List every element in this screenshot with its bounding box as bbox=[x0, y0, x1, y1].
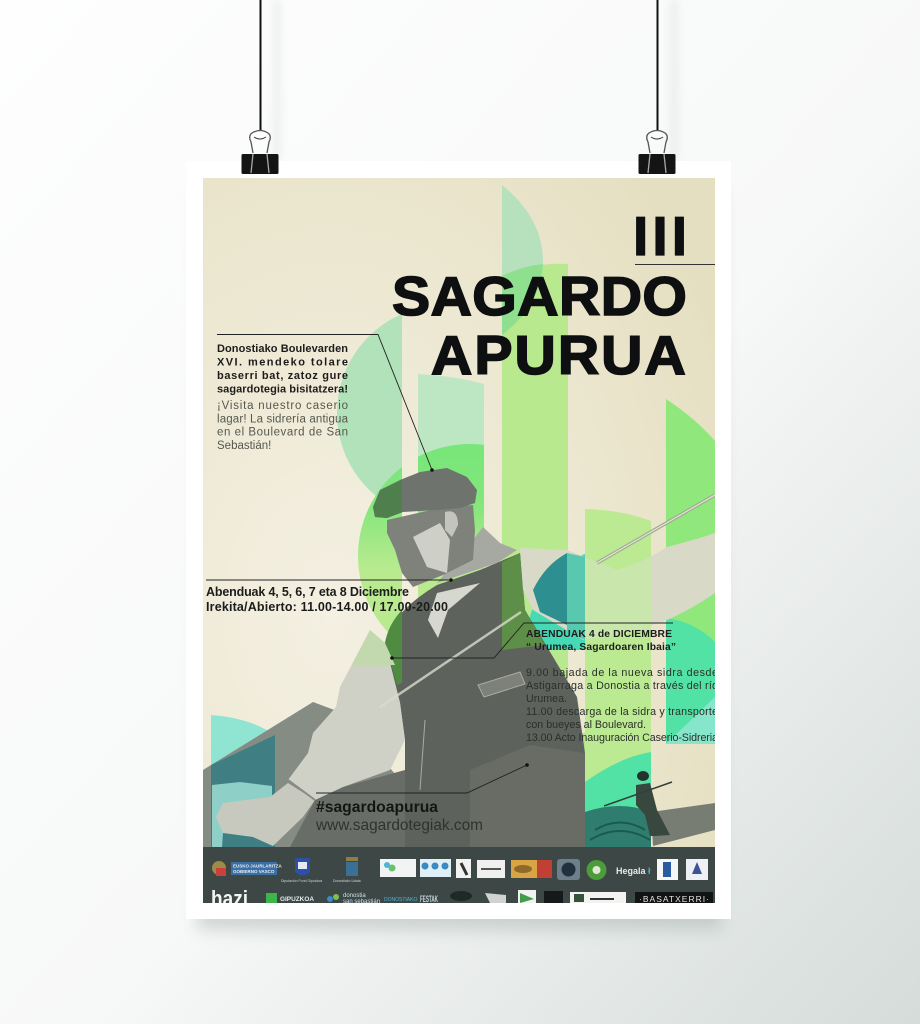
logo: Donostia San Sebastián: san sebastián bbox=[343, 899, 380, 905]
photo: shirt front bbox=[428, 583, 480, 638]
logo: Basque Government: GOBIERNO VASCO bbox=[233, 869, 275, 874]
text block: intro Basque: sagardotegia bisitatzera! bbox=[217, 384, 348, 396]
callout: dates leader line bbox=[206, 578, 453, 582]
shape: bright circle column part bbox=[418, 444, 484, 598]
photo: lime through sleeve bbox=[585, 558, 651, 640]
text block: programme: Urumea. bbox=[526, 693, 567, 705]
photo: small figure in distance bbox=[604, 771, 672, 836]
text block: intro Spanish: en el Boulevard de San bbox=[217, 426, 348, 438]
photo: window glow bbox=[212, 782, 272, 847]
text block: intro Basque: baserri bat, zatoz gure bbox=[217, 370, 348, 382]
icon: binder clip left bbox=[242, 130, 278, 174]
text block: programme: Astigarraga a Donostia a través del río bbox=[526, 680, 718, 692]
text block: intro Basque: Donostiako Boulevarden bbox=[217, 343, 348, 355]
logo: Basatxerri: ·BASATXERRI· bbox=[639, 894, 709, 904]
photo: shirt collar and scarf bbox=[437, 527, 517, 583]
shape: right column bbox=[666, 399, 715, 744]
shape: teal right bbox=[666, 618, 715, 744]
shape: top half circle bbox=[502, 185, 543, 276]
photo: cider maker bbox=[203, 468, 715, 847]
logo: Hegala: Hegala ł bbox=[616, 866, 651, 876]
text block: programme: 9.00 bajada de la nueva sidra desde bbox=[526, 667, 718, 679]
photo: left sleeve bbox=[288, 630, 405, 800]
text block: intro Basque: XVI. mendeko tolare bbox=[217, 356, 348, 368]
photo: beret green tint bbox=[373, 480, 403, 518]
photo: left hand bbox=[216, 783, 315, 846]
text block: intro Spanish bbox=[217, 400, 349, 452]
poster artwork bbox=[203, 178, 718, 911]
photo: lower coat lighter bbox=[470, 745, 585, 847]
photo: barrels bbox=[585, 806, 651, 847]
logo: Festak bbox=[384, 894, 438, 904]
logo: Festak: DONOSTIAKO bbox=[384, 897, 417, 903]
shape: short pale column bbox=[418, 374, 484, 457]
callout: programme leader line bbox=[390, 623, 673, 660]
logo: Basque Government bbox=[212, 861, 283, 876]
callout: web leader line bbox=[316, 763, 529, 793]
photo: torso vest bbox=[385, 553, 585, 847]
text block: website: www.sagardotegiak.com bbox=[315, 817, 483, 834]
logo: dark oval bbox=[450, 891, 472, 901]
text block: intro Basque bbox=[217, 343, 348, 396]
logo: Donostia San Sebastián: donostia bbox=[343, 893, 366, 899]
text block: dates: Abenduak 4, 5, 6, 7 eta 8 Diciembre bbox=[206, 585, 409, 599]
green geometric shapes bbox=[211, 185, 715, 850]
photo: white chest highlight bbox=[380, 612, 521, 707]
photo: building at left bbox=[203, 702, 400, 847]
text block: programme bbox=[526, 667, 718, 744]
text block: dates bbox=[206, 585, 448, 614]
photo: sleeve upper lime tint bbox=[352, 630, 395, 665]
shape: fourth column bbox=[585, 509, 651, 782]
callout: intro leader line bbox=[217, 334, 434, 472]
logo: small white mark bbox=[485, 893, 506, 903]
photo: sleeve of right arm bbox=[520, 533, 715, 640]
photo: cuff shade bbox=[288, 780, 315, 800]
logo: Donostia San Sebastián bbox=[327, 893, 380, 905]
sponsor logos bbox=[211, 857, 713, 911]
logo: Gipuzkoa: GIPUZKOA bbox=[280, 896, 314, 903]
shape: overlap of column and half circle bbox=[502, 264, 543, 335]
shape: teal lower circle bbox=[585, 752, 651, 812]
logo: Basque Government: EUSKO JAURLARITZA bbox=[233, 864, 283, 868]
logo: white boxes right bbox=[657, 859, 708, 880]
logo: Diputación: Diputación Foral Gipuzkoa bbox=[281, 879, 322, 883]
photo: vest green left bbox=[385, 610, 402, 685]
title: III: III bbox=[633, 205, 687, 267]
text block: programme: 11.00 descarga de la sidra y transporte bbox=[526, 706, 718, 718]
logo: flag bbox=[518, 890, 536, 903]
shape: left half circle bbox=[337, 314, 402, 496]
shape: bright circle left part bbox=[358, 467, 402, 632]
logo: Ayuntamiento bbox=[333, 857, 361, 883]
title: SAGARDO: SAGARDO bbox=[392, 265, 687, 327]
photo: ear bbox=[445, 511, 458, 537]
logo: Gipuzkoa bbox=[266, 893, 314, 903]
logo: Festak: FESTAK bbox=[420, 894, 438, 904]
logo: Diputación bbox=[281, 858, 322, 883]
photo: teal through sleeve right bbox=[567, 553, 585, 640]
icon: binder clip right bbox=[638, 130, 676, 174]
text block: hashtag: #sagardoapurua bbox=[316, 799, 438, 816]
sponsor strip bbox=[203, 847, 715, 903]
text block: intro Spanish: Sebastián! bbox=[217, 440, 271, 452]
shape: teal light right bottom bbox=[666, 697, 715, 744]
poster white sheet bbox=[186, 161, 731, 919]
shape: small teal half circle bbox=[211, 715, 268, 765]
string shadows bbox=[273, 0, 678, 160]
photo: face and beard bbox=[387, 505, 475, 587]
text block: dates: Irekita/Abierto: 11.00-14.00 / 17.00-20.00 bbox=[206, 600, 448, 614]
shape: teal circle upper bbox=[530, 554, 585, 650]
hanging string left bbox=[260, 0, 262, 131]
logo: Ayuntamiento: Donostiako Udala bbox=[333, 879, 361, 883]
photo: ground behind figure bbox=[651, 803, 715, 846]
text block: programme heading bbox=[526, 629, 676, 653]
text block: programme heading: ABENDUAK 4 de DICIEMBRE bbox=[526, 629, 672, 640]
photo: building teal overlap bbox=[211, 735, 275, 847]
photo: long pole bbox=[597, 495, 715, 563]
paper background bbox=[203, 178, 715, 903]
photo: vest green strip bbox=[502, 553, 545, 650]
logo: white boxes row one bbox=[380, 859, 606, 880]
text block: intro Spanish: lagar! La sidrería antigua bbox=[217, 414, 349, 426]
title: APURUA: APURUA bbox=[431, 324, 686, 386]
logo: black box bbox=[544, 891, 563, 903]
shape: yellow-green gap fill bbox=[582, 733, 585, 752]
poster shadow bbox=[198, 190, 722, 930]
shape: tall central column bbox=[502, 264, 568, 682]
hanging string right bbox=[656, 0, 658, 131]
logo: hazi: hazi bbox=[211, 886, 248, 911]
photo: dark scene below arm bbox=[290, 770, 405, 847]
text block: intro Spanish: ¡Visita nuestro caserio bbox=[217, 400, 348, 412]
photo: beret bbox=[373, 468, 477, 518]
logo: white box bbox=[570, 892, 626, 903]
title rule bbox=[635, 264, 715, 265]
text block: programme heading: “ Urumea, Sagardoaren Ibaia” bbox=[526, 642, 676, 653]
text block: programme: 13.00 Acto Inauguración Caserio-Sidreria bbox=[526, 732, 718, 744]
photo: teal through sleeve bbox=[533, 553, 567, 625]
text block: programme: con bueyes al Boulevard. bbox=[526, 719, 646, 731]
photo: pocket and chain bbox=[420, 672, 525, 790]
photo: beard highlight bbox=[413, 523, 450, 573]
